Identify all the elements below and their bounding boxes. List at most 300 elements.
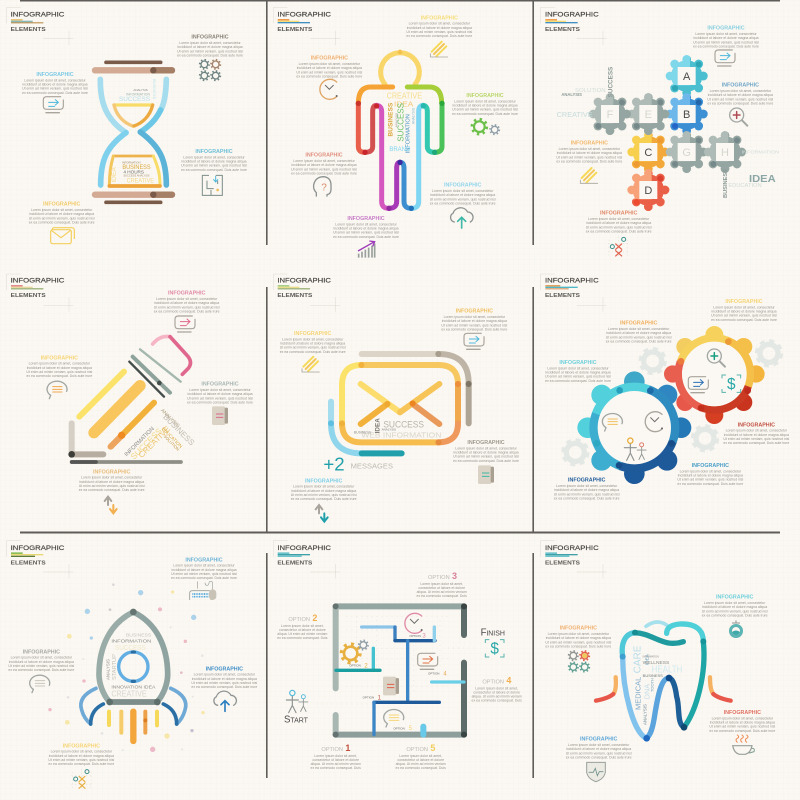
panel: hourglass: [7, 7, 247, 244]
text block: upper middle: ex ea commodo consequat. Duis aute irure: [606, 340, 672, 344]
text block: top: incididunt ut labore et dolore magna aliqua: [154, 301, 219, 305]
text block: option 3: Lorem ipsum dolor sit amet,: [420, 582, 463, 586]
icon: head question: [314, 177, 331, 197]
word cloud: ANALYSIS: [642, 704, 647, 725]
text block: left: INFOGRAPHIC: [571, 141, 608, 147]
text block: top right: [441, 309, 507, 332]
word cloud: bottom: SUCCESS ANALYSIS: [123, 174, 150, 178]
text block: option 5: OPTION: [406, 747, 428, 753]
text block: top right: Ut enim ad minim veniam, quis nostrud nisi: [177, 49, 243, 53]
text block: right: Ut enim ad minim veniam, quis nostrud nisi: [707, 97, 773, 101]
heading: infographic elements: [541, 7, 607, 45]
gear H: H: [721, 147, 729, 159]
text block: option 3: ex ea commodo consequat. Duis: [417, 594, 467, 598]
panel: gears with letters: [541, 7, 779, 256]
text block: left: Lorem ipsum dolor sit amet, consectetur: [11, 656, 73, 660]
word cloud: STARTUP: [112, 654, 118, 680]
text block: option 5: aliqua. Ut enim ad minim veniam: [396, 762, 446, 766]
text block: bottom left: INFOGRAPHIC: [43, 202, 80, 208]
text block: left: Ut enim ad minim veniam, quis nostrud nisi: [545, 640, 611, 644]
text block: right: ex ea commodo consequat. Duis aute irure: [187, 401, 253, 405]
word cloud: top: INFORMATION: [126, 93, 151, 97]
text block: lower left: [291, 153, 357, 175]
text block: option 1: consectetur ut labore et dolore: [312, 758, 359, 762]
word cloud: CARE: [633, 645, 644, 673]
word cloud: [124, 408, 196, 461]
text block: right: ex ea commodo consequat. Duis aute irure: [453, 459, 519, 463]
text block: top right: Lorem ipsum dolor sit amet, consectetur: [173, 564, 236, 568]
text block: left: [545, 626, 611, 648]
word cloud: ANALYSIS: [106, 659, 111, 680]
text block: right: Lorem ipsum dolor sit amet, consectetur: [454, 99, 517, 103]
heading: infographic elements: INFOGRAPHIC: [277, 278, 331, 285]
text block: top right: incididunt ut labore et dolore magna aliqua: [177, 45, 243, 49]
finish label: F: [481, 628, 487, 639]
text block: left: Ut enim ad minim veniam, quis nostrud nisi: [545, 375, 611, 379]
icon: monitor: [175, 316, 195, 332]
text block: right: INFOGRAPHIC: [724, 710, 761, 716]
icon: gears, option 2: OPTION: [349, 664, 361, 668]
text block: bottom left: INFOGRAPHIC: [580, 737, 617, 743]
gear B: [666, 93, 708, 135]
text block: lower left: INFOGRAPHIC: [305, 153, 343, 159]
word cloud: EDUCATION: [161, 426, 183, 449]
word cloud: top: [119, 79, 157, 103]
text block: top right: [702, 595, 768, 617]
text block: top right: INFOGRAPHIC: [456, 309, 493, 315]
text block: option 1: ex ea commodo consequat. Duis: [311, 766, 361, 770]
text block: top right: Ut enim ad minim veniam, quis nostrud nisi: [702, 609, 768, 613]
icon: gears, option 2: [341, 640, 368, 669]
word cloud: INFORMATION: [643, 655, 659, 658]
text block: right: Ut enim ad minim veniam, quis nostrud nisi: [453, 455, 519, 459]
text block: bottom left: Ut enim ad minim veniam, quis nostrud nisi: [291, 493, 357, 497]
text block: top right: INFOGRAPHIC: [185, 557, 223, 563]
tooth chart: [596, 622, 731, 742]
word cloud: BRAND: [389, 147, 411, 153]
icon: growth chart: [358, 241, 375, 258]
icon: dollar: [722, 375, 741, 393]
text block: right: incididunt ut labore et dolore magna aliqua: [187, 392, 253, 396]
word cloud: SOLUTION: [163, 434, 181, 452]
gear G: G: [682, 147, 691, 159]
text block: left: Ut enim ad minim veniam, quis nostrud nisi: [26, 370, 92, 374]
heading: infographic elements: INFOGRAPHIC: [545, 278, 599, 285]
panel: envelope: [273, 274, 519, 522]
text block: top right: ex ea commodo consequat. Duis aute irure: [177, 53, 243, 57]
text block: lower middle: INFOGRAPHIC: [692, 463, 729, 469]
text block: option 1: aliqua. Ut enim ad minim veniam: [311, 762, 361, 766]
text block: option 5: [396, 743, 446, 770]
icon: gears: [472, 119, 499, 134]
text block: left: INFOGRAPHIC: [560, 626, 597, 632]
text block: right: ex ea commodo consequat. Duis aute irure: [707, 101, 773, 105]
finish label: [481, 628, 505, 658]
text block: top right: ex ea commodo consequat. Duis aute irure: [441, 328, 507, 332]
icon: flask: [729, 620, 743, 638]
text block: left: INFOGRAPHIC: [23, 649, 60, 655]
text block: left: [8, 649, 74, 672]
icon: people: [624, 438, 646, 460]
icon: gears, option 2: 2: [364, 663, 368, 669]
text block: right: Lorem ipsum dolor sit amet, consectetur: [710, 89, 772, 93]
text block: left: [556, 141, 622, 163]
word cloud: SUCCESS: [115, 643, 146, 652]
icon: monitor: [688, 377, 708, 393]
text block: top: Lorem ipsum dolor sit amet, consectetur: [695, 32, 758, 36]
text block: top right: Lorem ipsum dolor sit amet, consectetur: [179, 41, 242, 45]
text block: bottom: incididunt ut labore et dolore magna aliqua: [79, 480, 144, 484]
gear A: A: [683, 71, 691, 83]
text block: bottom: incididunt ut labore et dolore magna aliqua: [49, 754, 114, 758]
text block: bottom: [48, 743, 114, 766]
word cloud: HEALTH: [652, 665, 682, 676]
heading: infographic elements: [541, 541, 607, 578]
text block: bottom: [79, 469, 145, 492]
text block: lower right: Ut enim ad minim veniam, quis nostrud nisi: [430, 197, 496, 201]
text block: top: Lorem ipsum dolor sit amet, consectetur: [713, 305, 776, 309]
heading: infographic elements: INFOGRAPHIC: [545, 545, 599, 552]
word cloud: IDEA: [394, 100, 413, 109]
word cloud: bottom: IDEA: [111, 167, 118, 183]
text block: top: INFOGRAPHIC: [421, 15, 458, 21]
text block: left: Ut enim ad minim veniam, quis nostrud nisi: [556, 155, 622, 159]
text block: option 5: Lorem ipsum dolor sit amet,: [399, 754, 442, 758]
icon: clock, option 3: [405, 613, 426, 640]
text block: lower right: INFOGRAPHIC: [444, 183, 481, 189]
text block: left: Lorem ipsum dolor sit amet, consectetur: [282, 337, 344, 341]
gear D: [627, 169, 669, 211]
word cloud: top: ANALYSIS: [133, 88, 148, 92]
text block: top: INFOGRAPHIC: [725, 299, 763, 305]
text block: upper left: Lorem ipsum dolor sit amet, consectetur: [299, 62, 361, 66]
word cloud: INFORMATION: [742, 150, 779, 155]
text block: right: ex ea commodo consequat. Duis aute irure: [709, 729, 775, 733]
text block: bottom: Lorem ipsum dolor sit amet, consectetur: [588, 217, 650, 221]
start label: S: [284, 714, 290, 725]
word cloud: SUCCESS: [396, 103, 405, 142]
icon: coffee cup: [733, 735, 754, 754]
text block: upper left: INFOGRAPHIC: [311, 56, 348, 62]
text block: option 3: 3: [452, 571, 457, 581]
text block: right: ex ea commodo consequat. Duis aute irure: [452, 112, 518, 116]
heading: infographic elements: ELEMENTS: [545, 560, 580, 566]
text block: upper left: [296, 56, 362, 78]
text block: option 2: [277, 613, 328, 640]
text block: lower left: Ut enim ad minim veniam, quis nostrud nisi: [291, 167, 357, 171]
text block: right: Ut enim ad minim veniam, quis nostrud nisi: [452, 108, 518, 112]
word cloud: ANALYSIS: [382, 428, 396, 432]
text block: bottom: Lorem ipsum dolor sit amet, consectetur: [81, 476, 143, 480]
text block: top right: [171, 557, 237, 580]
text block: lower middle: Ut enim ad minim veniam, quis nostrud nisi: [677, 478, 743, 482]
panel: maze: [273, 541, 522, 770]
text block: top right: Lorem ipsum dolor sit amet, consectetur: [704, 601, 766, 605]
word cloud: BUSINESS: [161, 412, 196, 447]
text block: option 3: consectetur ut labore et dolore: [418, 586, 465, 590]
text block: right: Ut enim ad minim veniam, quis nostrud nisi: [723, 437, 789, 441]
icon: monitor: [715, 50, 735, 66]
text block: right: Ut enim ad minim veniam, quis nostrud nisi: [709, 725, 775, 729]
warm gear: [664, 326, 765, 424]
word cloud: INFORMATION: [405, 114, 411, 153]
text block: bottom left: incididunt ut labore et dolore magna aliqua: [291, 489, 356, 493]
text block: bottom left: INFOGRAPHIC: [568, 478, 605, 484]
text block: top: incididunt ut labore et dolore magna aliqua: [711, 310, 777, 314]
text block: option 1: [311, 743, 361, 770]
text block: right: [191, 666, 257, 689]
icon: monitor, option 4: 4: [443, 671, 447, 677]
word cloud: bottom: BUSINESS: [122, 164, 151, 171]
text block: right: [187, 382, 253, 405]
text block: right: INFOGRAPHIC: [195, 149, 233, 155]
text block: bottom left: incididunt ut labore et dolore magna aliqua: [554, 488, 619, 492]
word cloud: ANALYSIS: [394, 113, 398, 127]
word cloud: DNA: [643, 684, 652, 699]
heading: infographic elements: INFOGRAPHIC: [11, 545, 64, 552]
icon: monitor: [464, 333, 484, 349]
text block: lower left: ex ea commodo consequat. Duis aute irure: [291, 171, 357, 175]
text block: bottom left: [566, 737, 632, 759]
text block: bottom left: [554, 478, 620, 501]
heading: infographic elements: [7, 7, 73, 45]
text block: left: ex ea commodo consequat. Duis aute irure: [545, 644, 611, 648]
icon: pencil: [430, 42, 448, 57]
heading: infographic elements: ELEMENTS: [277, 560, 313, 566]
word cloud: INFORMATION: [111, 638, 152, 644]
text block: right: incididunt ut labore et dolore magna aliqua: [181, 159, 247, 163]
icon: monitor: [43, 97, 63, 113]
text block: option 5: 5: [430, 743, 435, 753]
word cloud: [387, 92, 422, 153]
gear A: [666, 55, 708, 97]
heading: infographic elements: ELEMENTS: [11, 293, 46, 299]
text block: top: Ut enim ad minim veniam, quis nostrud nisi: [406, 30, 472, 34]
text block: option 2: ex ea commodo consequat. Duis: [277, 636, 328, 640]
text block: top: ex ea commodo consequat. Duis aute irure: [406, 34, 472, 38]
text block: option 2: aliqua. Ut enim ad minim veniam: [277, 632, 328, 636]
gear D: D: [644, 185, 652, 197]
text block: left: ex ea commodo consequat. Duis aute irure: [8, 668, 74, 672]
icon: chat: [602, 414, 622, 431]
text block: upper middle: incididunt ut labore et dolore magna aliqua: [606, 331, 671, 335]
text block: lower right: Lorem ipsum dolor sit amet, consectetur: [432, 189, 494, 193]
text block: right: INFOGRAPHIC: [201, 382, 239, 388]
word cloud: bottom: INFORMATION: [122, 160, 140, 164]
text block: bottom: ex ea commodo consequat. Duis aute irure: [333, 235, 399, 239]
text block: right: INFOGRAPHIC: [466, 93, 504, 99]
icon: strategy board: [72, 769, 92, 788]
word cloud: ANALYSIS: [561, 92, 582, 97]
icon: chat: [30, 675, 50, 693]
finish label: INISH: [486, 631, 505, 638]
text block: bottom left: ex ea commodo consequat. Duis aute irure: [291, 497, 357, 501]
text block: right: ex ea commodo consequat. Duis aute irure: [181, 168, 247, 172]
text block: top right: incididunt ut labore et dolore magna aliqua: [442, 319, 507, 323]
text block: left: incididunt ut labore et dolore magna aliqua: [546, 636, 611, 640]
heading: infographic elements: ELEMENTS: [545, 27, 580, 33]
text block: option 4: OPTION: [482, 679, 504, 685]
rocket chart: [81, 609, 186, 741]
text block: bottom: incididunt ut labore et dolore magna aliqua: [586, 221, 651, 225]
word cloud: IDEA: [749, 174, 776, 185]
text block: upper middle: Ut enim ad minim veniam, quis nostrud nisi: [606, 335, 672, 339]
heading: infographic elements: [273, 7, 340, 45]
text block: left: Lorem ipsum dolor sit amet, consectetur: [29, 362, 91, 366]
icon: pencil: [302, 357, 319, 372]
text block: right: [181, 149, 247, 172]
text block: top right: ex ea commodo consequat. Duis aute irure: [171, 576, 237, 580]
text block: option 1: Lorem ipsum dolor sit amet,: [314, 754, 357, 758]
text block: option 4: Lorem ipsum dolor sit amet,: [475, 686, 518, 690]
text block: left: incididunt ut labore et dolore magna aliqua: [27, 366, 92, 370]
text block: left: ex ea commodo consequat. Duis aute irure: [556, 159, 622, 163]
icon: notebook, option 1: 1: [378, 695, 382, 701]
text block: upper left: incididunt ut labore et dolore magna aliqua: [297, 66, 362, 70]
text block: top: incididunt ut labore et dolore magna aliqua: [407, 26, 472, 30]
text block: option 4: [472, 675, 522, 702]
text block: right: Lorem ipsum dolor sit amet, consectetur: [189, 388, 252, 392]
heading: infographic elements: [7, 274, 73, 312]
text block: option 2: consectetur ut labore et dolore: [279, 628, 326, 632]
word cloud: SUCCESS: [128, 426, 164, 461]
word cloud: BUSINESS: [723, 169, 729, 198]
icon: monitor, option 4: OPTION: [428, 672, 439, 676]
text block: left: [545, 360, 611, 383]
gear H: [704, 131, 746, 173]
heading: infographic elements: [7, 541, 73, 578]
text block: top: [154, 291, 220, 314]
word cloud: [557, 67, 779, 198]
text block: option 3: aliqua. Ut enim ad minim veniam: [417, 590, 467, 594]
word cloud: [106, 633, 156, 698]
word cloud: CREATIVE: [111, 689, 147, 698]
heading: infographic elements: ELEMENTS: [545, 293, 580, 299]
text block: bottom: incididunt ut labore et dolore magna aliqua: [333, 226, 399, 230]
text block: top: INFOGRAPHIC: [168, 291, 205, 297]
messages callout: +2: [323, 454, 345, 475]
panel: tooth: [541, 541, 775, 782]
text block: lower middle: Lorem ipsum dolor sit amet, consectetur: [680, 469, 742, 473]
icon: shield: [587, 762, 605, 782]
gear E: E: [645, 109, 652, 121]
stars: [48, 583, 205, 752]
text block: right: Lorem ipsum dolor sit amet, consectetur: [712, 716, 774, 720]
text block: top: Ut enim ad minim veniam, quis nostrud nisi: [154, 305, 220, 309]
text block: upper middle: INFOGRAPHIC: [620, 321, 657, 327]
text block: lower right: [430, 183, 496, 205]
panel: two big gears: [541, 274, 789, 501]
text block: top right: ex ea commodo consequat. Duis aute irure: [702, 613, 768, 617]
text block: top right: [177, 35, 243, 57]
text block: left: [280, 331, 346, 354]
icon: arrows: [316, 505, 328, 522]
icon: cloud: [451, 208, 473, 228]
text block: bottom: INFOGRAPHIC: [63, 743, 100, 749]
icon: head question: ?: [321, 183, 327, 194]
text block: left: [26, 355, 92, 378]
text block: right: [707, 83, 773, 105]
text block: lower right: incididunt ut labore et dolore magna aliqua: [430, 193, 495, 197]
heading: infographic elements: [273, 274, 340, 312]
heading: infographic elements: INFOGRAPHIC: [11, 278, 64, 285]
word cloud: BUSINESS: [354, 430, 372, 434]
text block: lower right: ex ea commodo consequat. Duis aute irure: [430, 201, 496, 205]
text block: bottom: ex ea commodo consequat. Duis aute irure: [48, 762, 114, 766]
icon: notebook: [478, 465, 494, 484]
panel: human figure: [273, 7, 518, 258]
text block: left: incididunt ut labore et dolore magna aliqua: [545, 371, 611, 375]
text block: option 4: aliqua. Ut enim ad minim veniam: [472, 694, 522, 698]
text block: right: Ut enim ad minim veniam, quis nostrud nisi: [191, 681, 257, 685]
text block: top: [711, 299, 777, 322]
text block: bottom: ex ea commodo consequat. Duis aute irure: [586, 229, 652, 233]
text block: right: Lorem ipsum dolor sit amet, consectetur: [726, 429, 788, 433]
word cloud: IDEA: [645, 653, 650, 665]
text block: left: ex ea commodo consequat. Duis aute irure: [22, 91, 88, 95]
text block: left: ex ea commodo consequat. Duis aute irure: [280, 350, 346, 354]
start label: [284, 690, 309, 725]
text block: bottom: Lorem ipsum dolor sit amet, consectetur: [335, 222, 398, 226]
word cloud: BUSINESS: [388, 102, 395, 137]
text block: left: incididunt ut labore et dolore magna aliqua: [280, 342, 345, 346]
text block: right: ex ea commodo consequat. Duis aute irure: [723, 441, 789, 445]
text block: bottom left: Ut enim ad minim veniam, quis nostrud nisi: [554, 492, 620, 496]
word cloud: CREATIVE: [387, 92, 422, 101]
text block: bottom left: [291, 478, 357, 501]
icon: clock: [320, 79, 338, 99]
text block: top: Ut enim ad minim veniam, quis nostrud nisi: [693, 40, 759, 44]
text block: top right: Lorem ipsum dolor sit amet, consectetur: [444, 315, 506, 319]
text block: right: Lorem ipsum dolor sit amet, consectetur: [194, 673, 256, 677]
text block: left: ex ea commodo consequat. Duis aute irure: [545, 379, 611, 383]
word cloud: BUSINESS: [126, 633, 152, 639]
word cloud: INFORMATION: [124, 426, 156, 458]
text block: bottom: Ut enim ad minim veniam, quis nostrud nisi: [48, 758, 114, 762]
background gears: [563, 341, 781, 465]
text block: bottom left: Ut enim ad minim veniam, quis nostrud nisi: [29, 216, 95, 220]
text block: bottom left: incididunt ut labore et dolore magna aliqua: [29, 212, 94, 216]
gear G: [666, 131, 708, 173]
text block: bottom left: incididunt ut labore et dolore magna aliqua: [566, 747, 631, 751]
text block: left: Lorem ipsum dolor sit amet, consectetur: [548, 632, 610, 636]
word cloud: SUCCESS: [608, 67, 615, 97]
icon: chat: [47, 381, 67, 399]
text block: right: Ut enim ad minim veniam, quis nostrud nisi: [181, 164, 247, 168]
text block: bottom: INFOGRAPHIC: [600, 211, 637, 217]
icon: clock, option 3: 3: [422, 634, 426, 640]
text block: right: INFOGRAPHIC: [738, 422, 775, 428]
word cloud: [633, 645, 682, 725]
text block: upper left: ex ea commodo consequat. Duis aute irure: [296, 74, 362, 78]
text block: top: ex ea commodo consequat. Duis aute irure: [693, 44, 759, 48]
text block: right: ex ea commodo consequat. Duis aute irure: [191, 685, 257, 689]
word cloud: SOLUTION: [575, 88, 606, 94]
text block: top right: Ut enim ad minim veniam, quis nostrud nisi: [171, 572, 237, 576]
word cloud: EDUCATION: [728, 183, 762, 189]
text block: left: Lorem ipsum dolor sit amet, consectetur: [24, 78, 87, 82]
text block: bottom left: ex ea commodo consequat. Duis aute irure: [29, 220, 95, 224]
icon: dollar: $: [727, 376, 736, 393]
icon: magnifier: [730, 108, 747, 126]
cool gear: [577, 371, 691, 484]
icon: chat, option 5: 5: [409, 726, 413, 732]
word cloud: WEB INFORMATION: [361, 433, 441, 440]
text block: right: Ut enim ad minim veniam, quis nostrud nisi: [187, 396, 253, 400]
word cloud: WELLNESS: [643, 660, 669, 665]
text block: right: incididunt ut labore et dolore magna aliqua: [724, 433, 789, 437]
icon: clock: [645, 412, 663, 432]
